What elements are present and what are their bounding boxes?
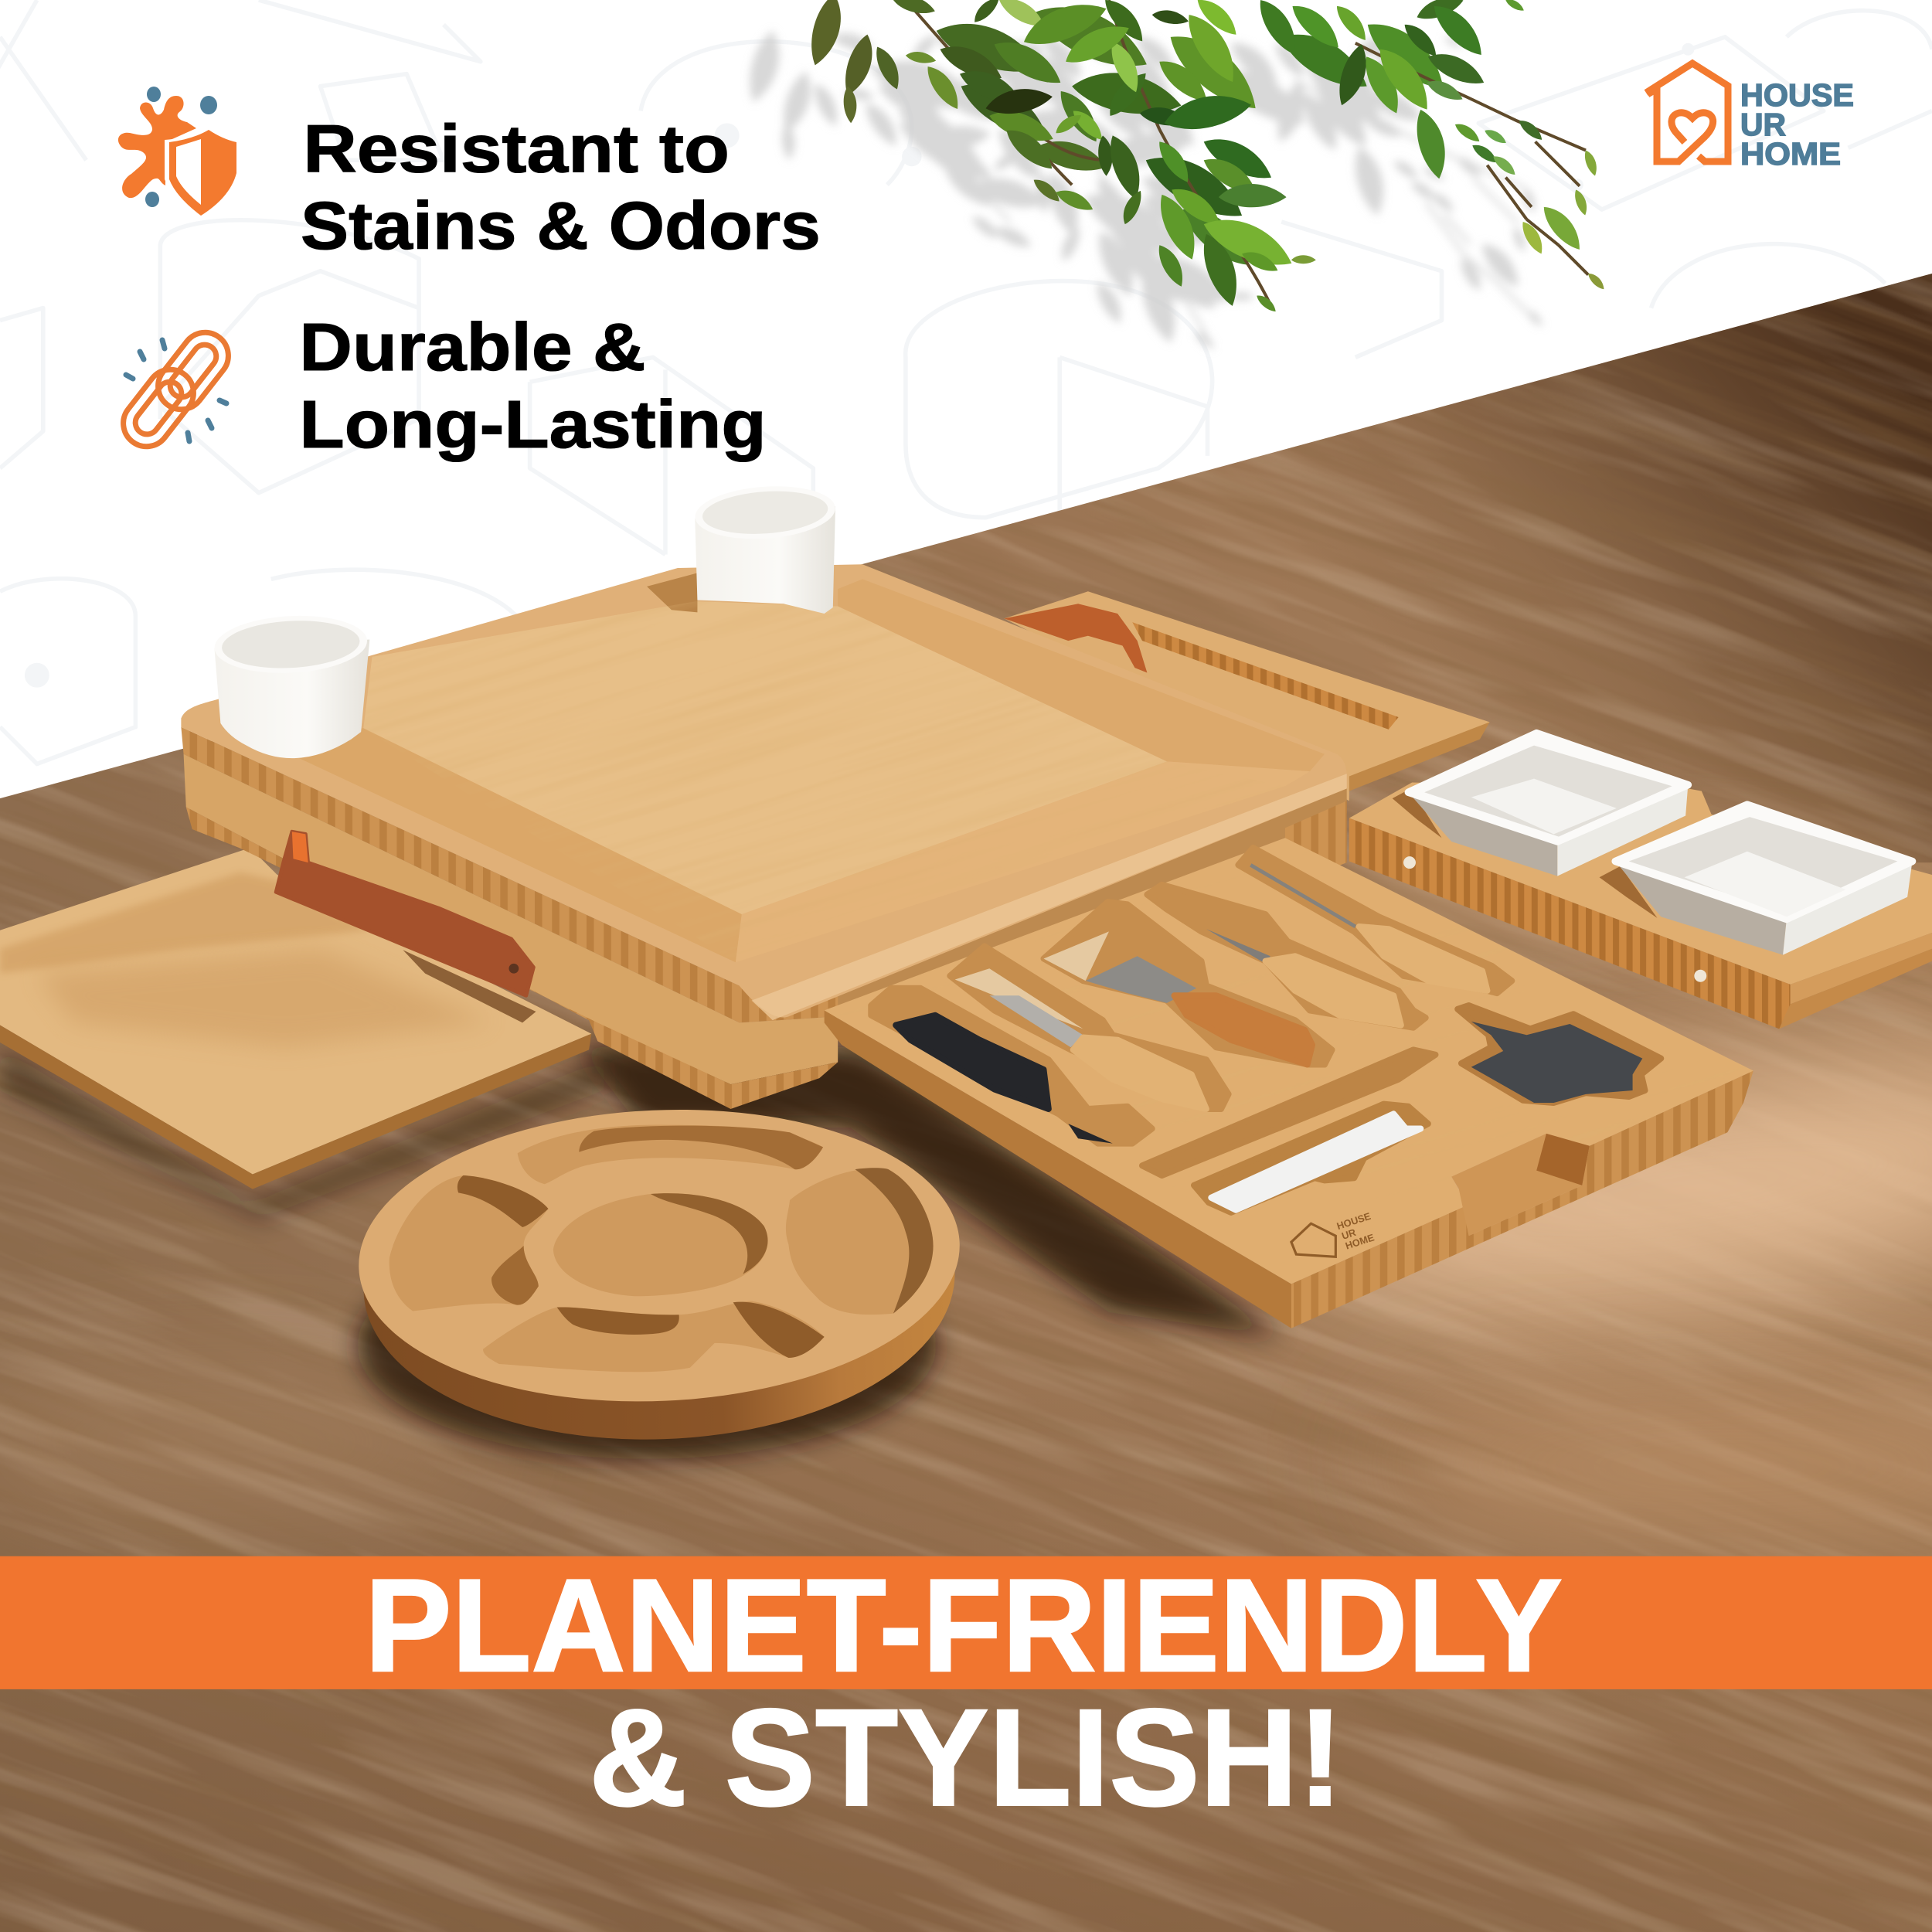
leaf shadow on white background: [743, 28, 1546, 352]
groove right: [838, 579, 1325, 771]
left compartment: [389, 1175, 549, 1311]
right leather strap: [1004, 604, 1147, 673]
chalk slot: [1194, 1104, 1428, 1213]
engraved logo: HOME: [1344, 1231, 1376, 1252]
feature text: durable and long-lasting: [299, 309, 767, 462]
wide cheese knife slot: [1043, 902, 1332, 1065]
feature text: durable and long-lasting: Long-Lasting: [299, 386, 767, 462]
corkscrew slot: [871, 988, 1152, 1144]
bamboo grain on plateau: [363, 601, 1285, 962]
engraved logo: [1291, 1210, 1376, 1257]
board rim: [181, 564, 1347, 1018]
board side: middle band: [184, 754, 838, 1084]
dish tray: [1349, 733, 1932, 1029]
orange banner: [0, 1556, 1932, 1689]
notch cut-out: [1451, 1134, 1590, 1236]
white ceramic cup right: [693, 482, 837, 614]
logo: House Ur Home: UR: [1740, 107, 1786, 142]
white dish right: [1600, 804, 1913, 955]
left leather strap: [276, 832, 533, 995]
icon: stain splat and shield: [118, 87, 240, 219]
narrow knife slot: [1238, 848, 1512, 993]
cup recess shadow: [647, 573, 697, 612]
right compartment: [786, 1168, 934, 1315]
main bamboo cutting board: [181, 564, 1347, 1109]
utensil drawer tray: [825, 838, 1753, 1328]
long narrow slot: [1142, 1049, 1435, 1175]
spreader knife slot: [950, 946, 1229, 1109]
top compartment: [518, 1125, 823, 1184]
feature text: resistant to stains and odors: Resistant to: [303, 111, 730, 186]
hanging green branch with leaves: [804, 0, 1607, 315]
feature text: resistant to stains and odors: Stains & Odors: [301, 188, 821, 264]
bottom compartment: [483, 1301, 825, 1372]
soft shadows under products: [0, 1047, 1281, 1459]
back bamboo lid tray: [1004, 591, 1490, 801]
white ceramic cup left: [213, 612, 369, 758]
centre compartment: [553, 1193, 768, 1296]
gap between board and drawer: [773, 788, 1347, 1020]
icon: chain links: [114, 323, 238, 456]
feature text: resistant to stains and odors: [301, 111, 821, 264]
board side: bottom stripes: [186, 807, 838, 1109]
headline: and stylish: & STYLISH!: [589, 1680, 1343, 1835]
feature text: durable and long-lasting: Durable &: [299, 309, 645, 385]
slate board slot: [1458, 1005, 1661, 1103]
logo: House Ur Home: HOUSE: [1740, 77, 1854, 113]
logo: House Ur Home: HOME: [1740, 136, 1841, 172]
rear right block: [1285, 801, 1347, 887]
fork knife slot: [1147, 885, 1426, 1028]
engraved logo: UR: [1340, 1226, 1357, 1242]
engraved logo: HOUSE: [1335, 1210, 1372, 1232]
left bamboo lid tray: [0, 848, 591, 1189]
white dish left: [1393, 733, 1688, 876]
plateau surface: [363, 601, 1167, 914]
headline: planet-friendly: PLANET-FRIENDLY: [365, 1553, 1563, 1699]
groove front: [736, 761, 1310, 962]
groove left: [259, 728, 742, 962]
round bamboo serving tray: [352, 1097, 966, 1449]
board side: upper stripes: [181, 727, 838, 1022]
logo: House Ur Home: [1646, 63, 1854, 172]
